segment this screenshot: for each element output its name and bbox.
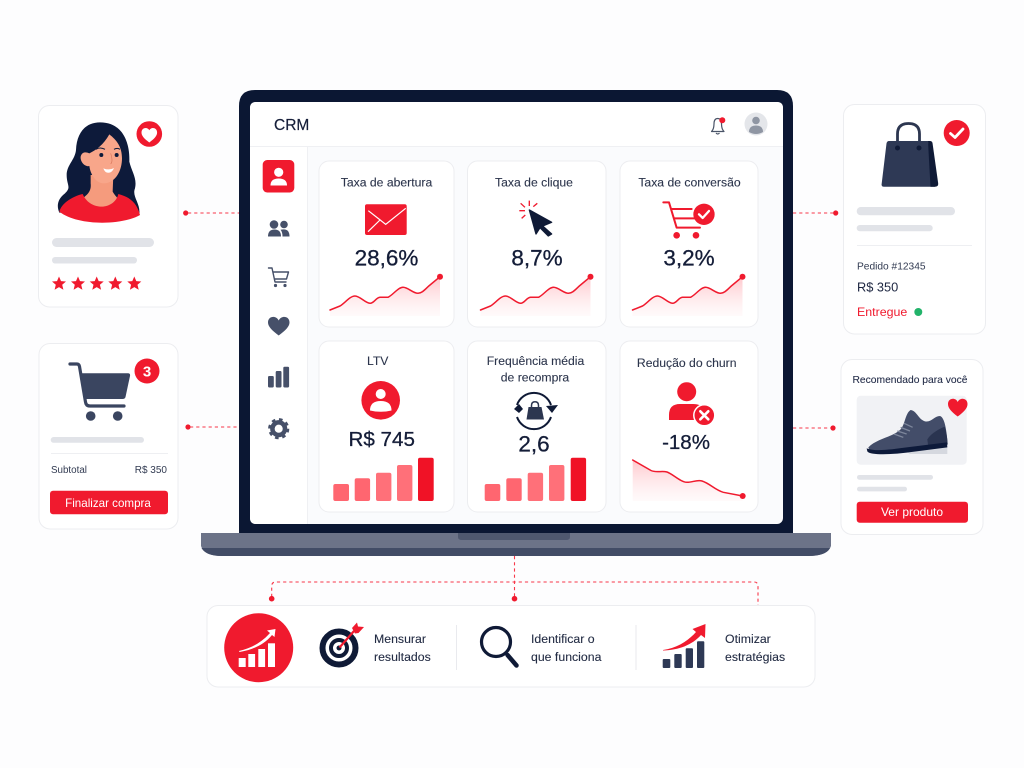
icon: cart with check — [663, 202, 715, 239]
badge: item count — [134, 358, 160, 384]
icon: user removed — [669, 382, 715, 426]
label: Taxa de abertura — [341, 176, 432, 190]
order amount: R$ 350 — [857, 280, 898, 294]
connector: recommendation to laptop — [793, 425, 836, 431]
icon: shopping bag — [882, 124, 938, 187]
button: view product: Ver produto — [881, 505, 943, 519]
sidebar navigation — [263, 160, 294, 438]
value: -18% — [662, 431, 710, 454]
rating stars — [52, 276, 141, 290]
product image — [857, 396, 967, 465]
nav: bars — [268, 367, 289, 388]
bar chart — [485, 458, 586, 501]
heading: Recomendado para você — [852, 375, 968, 386]
laptop frame — [239, 90, 793, 533]
nav: heart — [268, 317, 290, 336]
connector: laptop to benefits bar — [269, 556, 758, 605]
badge: check — [944, 120, 970, 146]
placeholder lines — [52, 238, 154, 264]
label: Taxa de clique — [495, 176, 573, 190]
delivery status: Entregue — [857, 305, 907, 319]
icon: user avatar — [744, 112, 768, 136]
icon: growth bars with arrow — [663, 624, 706, 668]
header: CRM title: CRM — [274, 117, 309, 134]
label: Frequência média — [487, 354, 584, 368]
text: measure results: resultados — [374, 650, 431, 664]
value: 28,6% — [355, 245, 418, 270]
text: optimize strategies — [725, 632, 785, 664]
button: checkout: Finalizar compra — [65, 497, 151, 510]
icon: growth badge — [224, 613, 293, 682]
panel: order status — [844, 104, 986, 334]
panel: click rate — [468, 161, 606, 327]
text: identify what works: Identificar o — [531, 632, 595, 646]
screen — [250, 102, 783, 524]
nav: gear — [269, 419, 288, 438]
icon: magnifier — [482, 628, 516, 666]
laptop base — [201, 533, 831, 556]
panel: customer profile — [38, 106, 178, 307]
icon: customer circle — [361, 381, 400, 420]
illustration: woman avatar — [58, 122, 140, 223]
value: 2,6 — [518, 432, 550, 457]
placeholder lines — [857, 207, 972, 246]
connector: profile to laptop — [183, 210, 239, 216]
panel: repurchase frequency — [468, 341, 606, 512]
icon: notification bell — [712, 117, 725, 134]
sparkline — [632, 274, 746, 316]
panel: churn reduction — [620, 341, 758, 512]
sparkline — [480, 274, 594, 316]
label second line: de recompra — [501, 371, 569, 385]
icon: cart — [70, 364, 130, 421]
panel: recommendation — [841, 360, 983, 534]
button: view product — [857, 502, 968, 523]
nav: group — [268, 220, 290, 236]
subtotal row: Subtotal — [51, 465, 87, 476]
text: optimize strategies: estratégias — [725, 650, 785, 664]
connector: cart to laptop — [185, 424, 239, 430]
icon: target — [322, 622, 364, 664]
laptop — [201, 90, 831, 556]
panel: benefits bar — [207, 606, 815, 687]
connector: order to laptop — [793, 210, 838, 216]
illustration: sneaker — [867, 410, 948, 454]
icon: heart — [948, 399, 968, 416]
panel: open rate — [319, 161, 454, 327]
sparkline — [330, 274, 443, 316]
badge: item count: 3 — [143, 364, 151, 380]
text: identify what works: que funciona — [531, 650, 602, 664]
value: 8,7% — [511, 245, 563, 270]
placeholder lines — [857, 475, 933, 491]
badge: heart — [136, 121, 162, 147]
subtotal row: R$ 350 — [135, 465, 167, 476]
panel: conversion rate — [620, 161, 758, 327]
icon: cursor — [519, 201, 552, 236]
text: measure results — [374, 632, 431, 664]
value: 3,2% — [663, 245, 715, 270]
order number: Pedido #12345 — [857, 262, 926, 272]
label: Redução do churn — [637, 356, 737, 370]
panel: LTV — [319, 341, 454, 512]
nav: active contact — [263, 160, 294, 192]
value: R$ 745 — [348, 428, 415, 451]
panel: shopping cart — [39, 344, 178, 529]
label: LTV — [367, 354, 389, 368]
icon: envelope — [365, 204, 407, 235]
label: Taxa de conversão — [638, 176, 741, 190]
line chart — [633, 460, 746, 501]
button: checkout — [50, 491, 168, 514]
subtotal row — [51, 454, 168, 476]
icon: repurchase cycle — [514, 393, 558, 429]
placeholder line — [51, 437, 144, 443]
text: measure results: Mensurar — [374, 632, 426, 646]
text: optimize strategies: Otimizar — [725, 632, 771, 646]
text: identify what works — [531, 632, 602, 664]
bar chart — [333, 458, 434, 501]
nav: cart — [268, 268, 288, 287]
